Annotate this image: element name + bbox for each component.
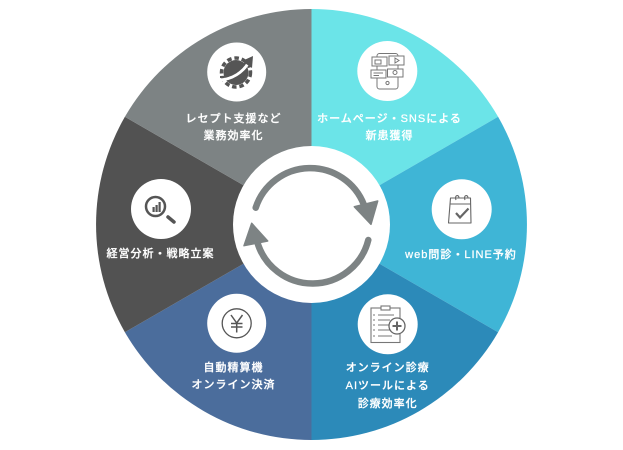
- icon: magnifier with bars: [131, 179, 191, 239]
- icon: calendar with check: [432, 179, 492, 239]
- label: homepage SNS: [317, 112, 462, 142]
- label: homepage SNS: ホームページ・SNSによる: [317, 112, 462, 125]
- label: operations efficiency: [186, 112, 282, 142]
- label: online care: オンライン診療: [346, 360, 430, 374]
- label: online care: [346, 360, 430, 410]
- icon: gear with rising arrow: [207, 42, 266, 102]
- segment: homepage SNS: [312, 9, 498, 224]
- label: web booking: web問診・LINE予約: [404, 247, 517, 261]
- arrow: clockwise bottom: [244, 223, 368, 284]
- icon: yen coin: [207, 294, 266, 353]
- label: homepage SNS: 新患獲得: [366, 128, 414, 142]
- icon: clipboard with medical cross: [358, 294, 418, 354]
- segment: payment: [125, 224, 312, 440]
- label: payment: 自動精算機: [204, 360, 264, 374]
- label: operations efficiency: レセプト支援など: [186, 112, 282, 125]
- arrow: clockwise top: [256, 168, 378, 224]
- label: payment: [192, 360, 276, 391]
- label: operations efficiency: 業務効率化: [204, 128, 264, 142]
- segment: management analysis: [96, 117, 312, 332]
- segment: online care: [312, 224, 498, 440]
- center circle with cycle arrows: [233, 146, 390, 303]
- label: online care: 診療効率化: [358, 396, 418, 410]
- label: payment: オンライン決済: [192, 377, 276, 391]
- segment: operations efficiency: [125, 9, 312, 224]
- label: online care: AIツールによる: [346, 379, 430, 392]
- segment: web booking: [312, 117, 527, 332]
- icon: smartphone with social bubbles: [357, 41, 417, 101]
- label: management analysis: 経営分析・戦略立案: [106, 246, 214, 260]
